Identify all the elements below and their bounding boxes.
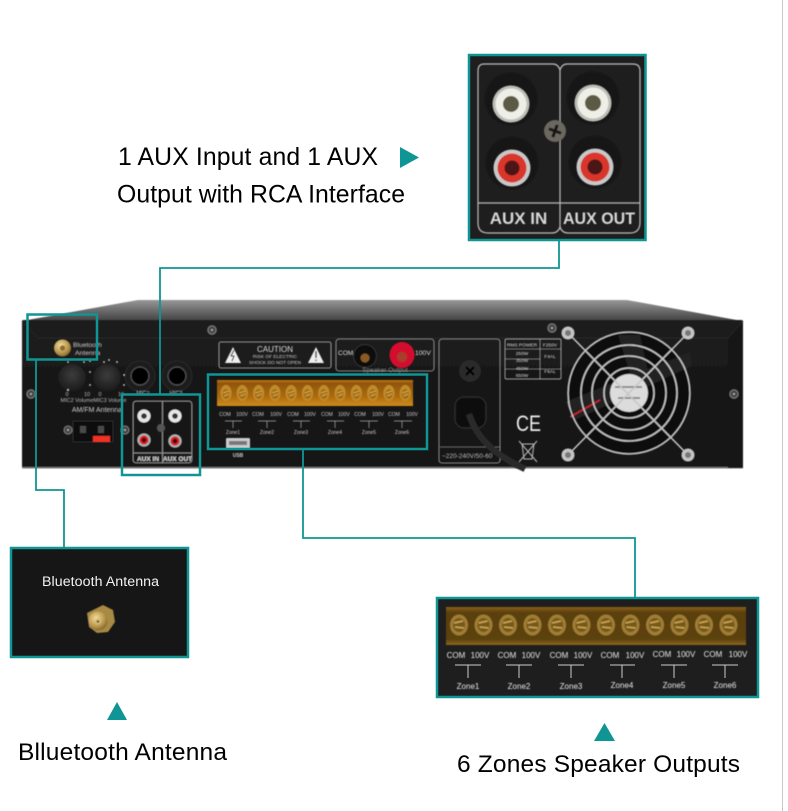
AM/FM antenna terminals: AM/FM Antenna [72,407,122,414]
six-zone terminal strip on amp: 100V [406,412,418,418]
small AUX in and out panel [133,401,192,463]
speaker output binding posts: Speaker Output [362,367,408,374]
RCA jack: AUX IN white [492,86,530,122]
AUX labels [490,209,636,228]
page edge rule [782,0,783,811]
RCA jack: AUX IN red [494,150,530,186]
zone labels [447,650,748,691]
zone labels: 100V [729,650,748,659]
power inlet panel [439,339,525,469]
mic volume knobs and jacks: 10 [118,392,124,398]
RCA jack: AUX OUT white [574,84,612,122]
mic volume knobs and jacks: 0 [65,392,69,398]
six-zone terminal strip on amp: Zone4 [328,430,342,436]
USB port [226,438,250,459]
caution label: CAUTION [257,345,293,354]
connector line: zones [303,449,635,597]
six-zone terminal strip on amp [217,380,418,436]
highlight box: AUX ports [122,394,200,475]
panel: AUX inset [469,55,646,240]
mic volume knobs and jacks [58,359,192,404]
arrow: up to bluetooth panel [107,702,127,720]
speaker output binding posts [336,339,434,374]
six-zone terminal strip on amp: 100V [270,412,282,418]
zone labels: Zone4 [611,681,634,690]
six-zone terminal strip on amp: COM [354,412,366,418]
zone labels: Zone5 [663,681,686,690]
zone labels: Zone2 [508,682,531,691]
six-zone terminal strip on amp: COM [388,412,400,418]
arrow: points to AUX inset [400,147,419,168]
fuse rating table: 350W [516,358,529,364]
cooling fan [562,326,694,462]
six-zone terminal strip on amp: 100V [372,412,384,418]
zone brackets [455,665,738,678]
panel: zones inset [437,598,758,697]
speaker output binding posts: 100V [415,350,431,357]
arrow: up to zones panel [594,723,615,741]
zone labels: COM [601,651,620,660]
mic volume knobs and jacks: MIC3 Volume [93,398,127,404]
icon: gold antenna connector [87,605,115,633]
caption: bluetooth antenna: Blluetooth Antenna [18,739,227,766]
fuse rating table: 650W [516,373,529,379]
bluetooth antenna connector on amp: Bluetooth [73,342,102,349]
zone labels: 100V [626,651,645,660]
CE and recycling marks [516,411,541,462]
bluetooth antenna connector on amp [54,340,102,357]
six-zone terminal strip on amp: Zone5 [362,430,376,436]
six-zone terminal strip on amp: Zone3 [294,430,308,436]
zone labels: COM [653,650,672,659]
zone labels: Zone3 [560,682,583,691]
mic volume knobs and jacks: MIC2 [136,391,150,397]
CE and recycling marks: CE [516,411,541,436]
fuse rating table: F6AL [544,369,556,375]
six-zone terminal strip on amp: 100V [338,412,350,418]
AUX labels: AUX OUT [563,209,636,228]
zone labels: Zone1 [457,682,480,691]
fuse rating table: F250V [543,342,558,348]
fuse rating table: 450W [516,366,529,372]
heading: AUX input and output: Output with RCA Interface [117,182,405,208]
amplifier rear view [22,300,743,469]
AUX labels: AUX IN [490,209,547,228]
mic volume knobs and jacks: 0 [98,392,102,398]
caution label [219,342,331,368]
caption: zones: 6 Zones Speaker Outputs [457,751,740,778]
heading: AUX input and output [117,144,405,208]
fuse rating table: 250W [516,351,529,357]
fuse rating table [505,339,561,379]
highlight box: bluetooth antenna [28,314,97,360]
power inlet panel: ~220-240V/50-60 [442,453,493,460]
six-zone terminal strip on amp: Zone2 [260,430,274,436]
mic volume knobs and jacks: MIC3 [169,391,183,397]
speaker output binding posts: COM [338,350,353,357]
zone labels: 100V [677,650,696,659]
zone labels: 100V [574,651,593,660]
zone labels: COM [498,651,517,660]
caution label: RISK OF ELECTRIC [253,354,298,360]
six-zone terminal strip on amp: 100V [304,412,316,418]
zone labels: Zone6 [714,681,737,690]
six-zone terminal strip on amp: COM [219,412,231,418]
small AUX in and out panel: AUX OUT [163,456,192,463]
zone labels: 100V [471,651,490,660]
RCA jack: AUX OUT red [576,148,614,186]
six-zone terminal strip on amp: 100V [236,412,248,418]
zone labels: COM [447,651,466,660]
amber terminal strip [446,607,746,645]
fuse rating table: F4AL [544,354,556,360]
panel: bluetooth antenna [11,548,188,657]
zone labels: 100V [522,651,541,660]
fuse rating table: RMS POWER [507,342,538,348]
highlight box: zone terminals [208,374,427,449]
six-zone terminal strip on amp: Zone6 [395,430,409,436]
heading: AUX input and output: 1 AUX Input and 1 AUX [118,144,378,171]
bluetooth antenna connector on amp: Antenna [75,350,101,357]
six-zone terminal strip on amp: Zone1 [226,430,240,436]
panel label: Bluetooth Antenna [42,574,159,590]
zone labels: COM [550,651,569,660]
mic volume knobs and jacks: 10 [84,392,90,398]
small AUX in and out panel: AUX IN [137,456,159,463]
AM/FM antenna terminals [63,407,130,442]
mic volume knobs and jacks: MIC2 Volume [60,398,94,404]
zone labels: COM [704,650,723,659]
center screw [544,120,566,142]
caution label: SHOCK DO NOT OPEN [249,360,301,366]
connector line: AUX [160,240,559,394]
six-zone terminal strip on amp: COM [287,412,299,418]
six-zone terminal strip on amp: COM [321,412,333,418]
amplifier chassis [22,300,743,468]
six-zone terminal strip on amp: COM [252,412,264,418]
USB port: USB [233,453,244,459]
connector line: bluetooth [36,359,64,548]
